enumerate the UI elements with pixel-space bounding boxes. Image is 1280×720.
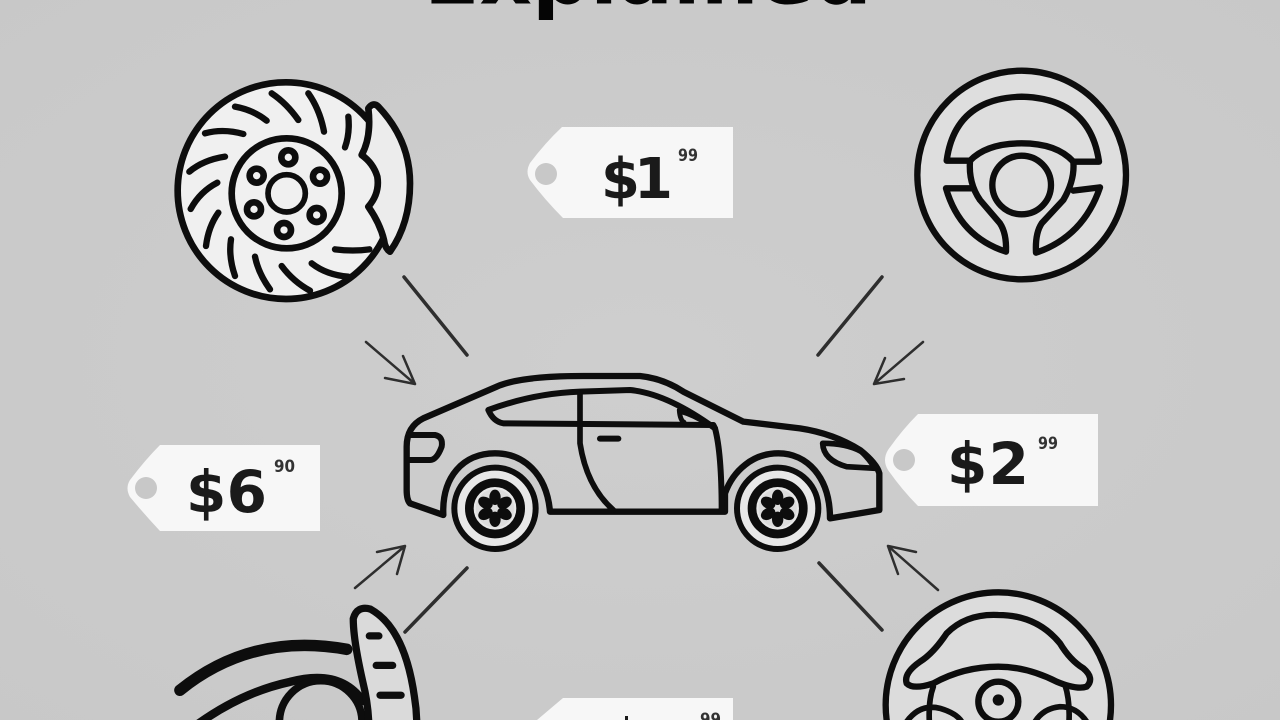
price tag: $1.99: 99 bbox=[678, 146, 698, 166]
rear wheel bbox=[454, 468, 536, 549]
price tag: $6.90: 90 bbox=[274, 457, 295, 477]
price tag: $2.99 bbox=[885, 414, 1098, 506]
icon: steering wheel top right bbox=[917, 71, 1126, 279]
icon: brake disc bbox=[178, 82, 410, 299]
arrow: top-right to car bbox=[818, 277, 923, 384]
price tag: $2.99: $2 bbox=[947, 430, 1029, 498]
icon: pedal and foot bbox=[180, 608, 417, 720]
arrow: bottom-right to car bbox=[819, 546, 938, 630]
price tag: $1.99: $1 bbox=[601, 147, 673, 212]
price tag: bottom, clipped bbox=[537, 698, 733, 720]
price tag: $2.99: 99 bbox=[1038, 434, 1058, 454]
arrow: bottom-left to car bbox=[355, 546, 467, 632]
price tag: $6.90: $6 bbox=[186, 458, 267, 526]
arrow: top-left to car bbox=[366, 277, 467, 384]
icon: car bbox=[407, 376, 879, 549]
price tag: $1.99 bbox=[528, 127, 733, 218]
front wheel bbox=[737, 468, 818, 549]
icon: steering wheel bottom right bbox=[886, 592, 1111, 720]
price tag: $6.90 bbox=[128, 445, 320, 531]
